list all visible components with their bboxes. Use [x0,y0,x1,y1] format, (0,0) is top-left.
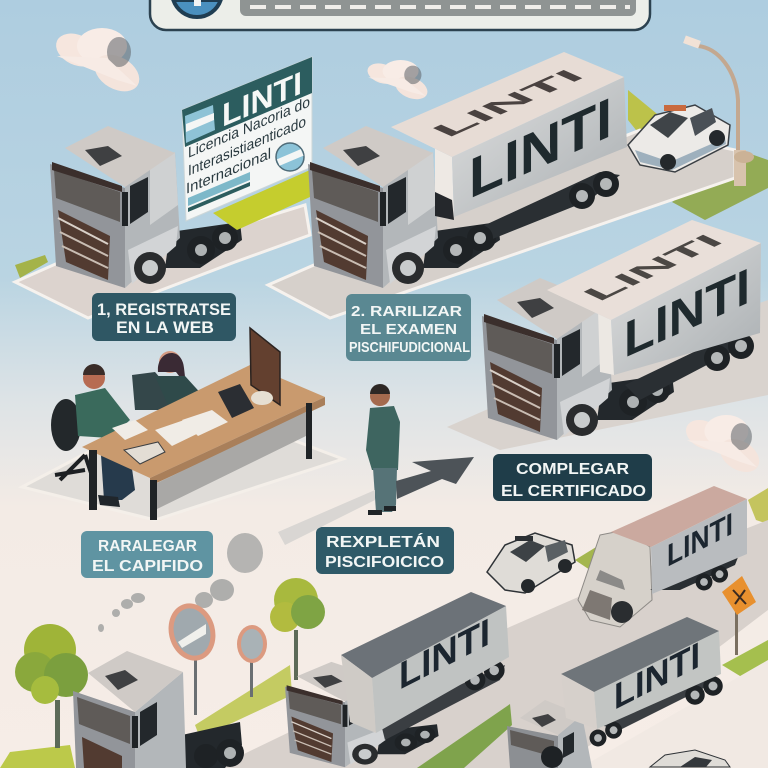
desk legs [89,403,312,520]
truck 6 trailer text: LINTI [399,609,490,698]
police car 1 [628,105,730,172]
header road strip [240,0,636,16]
truck 7 wheels [590,672,723,746]
trailer roof text: LINTI [575,231,731,305]
arrow [396,457,474,499]
person 2 [132,351,205,410]
truck 7 [507,617,723,768]
header banner [150,0,650,30]
label step 4 [81,531,213,578]
cloud 3 [681,414,765,479]
label step 2: 2. RARILIZAR [351,303,462,320]
truck 3 trailer [547,220,761,375]
trailer roof text: LINTI [425,66,592,141]
cloud 1 [51,27,146,99]
label step 1 [92,293,236,341]
label step 1: 1, REGISTRATSE [97,300,231,319]
truck 6 wheels [380,660,505,740]
tree left [15,624,88,748]
truck 4 wheels [650,552,740,590]
open drawer [124,442,165,464]
label step 5: REXPLETÁN [326,532,440,551]
label step 2 [346,294,471,361]
cloud 2 [364,59,432,104]
truck 4 trailer text: LINTI [667,505,733,574]
papers [112,410,228,446]
truck 6 [285,592,509,767]
label step 2: PISCHIFUDICIONAL [349,339,470,356]
sign body text: Interasistiaenticado [188,113,306,180]
truck 7 trailer text: LINTI [614,634,700,718]
person 1 [75,364,135,507]
label step 1: EN LA WEB [116,318,214,337]
sign body text: Internacional [186,145,271,198]
tree right [270,578,325,680]
sign stripes [188,172,250,212]
truck 5 bottom left cab [73,651,244,768]
truck 6 trailer [372,606,509,733]
icon: header info badge [173,0,221,17]
truck 1 with sign [50,57,312,288]
truck 4 small white truck [578,486,747,627]
road: truck 2 lane [268,130,735,318]
truck 7 cab [507,700,592,768]
road sign small [237,625,267,697]
LINTI sign board [182,57,312,230]
truck 6 cab [285,662,439,767]
truck 2 chassis and wheels [443,171,620,263]
sign body text: Licencia Nacoria do [188,94,310,162]
smoke trail [98,490,375,632]
chair [51,399,95,485]
desk scene [51,328,325,520]
label step 4: RARALEGAR [98,538,197,555]
sign title: LINTI [222,65,302,135]
flag [185,105,215,143]
telephone [251,391,273,405]
police car 2 [487,533,575,593]
laptop keyboard [218,384,254,418]
truck 7 trailer [594,631,721,729]
standing person [366,384,400,515]
trailer side text: LINTI [469,86,612,211]
trailer side text: LINTI [624,258,750,369]
label step 3: COMPLEGAR [516,461,629,478]
sign body text [186,94,310,198]
desk side panel [155,410,310,510]
label step 2: EL EXAMEN [360,321,457,338]
truck 3 cab [482,278,674,440]
sign round flag badge [276,143,304,171]
street lamp [683,36,754,186]
truck 1 cab [50,126,242,288]
road: truck 1 pad [15,205,310,318]
police car 3 [650,750,730,767]
road sign large [162,598,222,715]
label step 3 [493,454,652,501]
road: bottom right [580,660,768,768]
desk scene pad [22,420,343,520]
label step 5: PISCIFOICICO [325,554,444,571]
road: truck 3 lane [447,300,768,450]
grass: lower strip [417,704,512,768]
truck 4 trailer [651,499,747,594]
truck 4 cab [578,530,652,627]
truck 2 trailer [391,52,627,220]
road: lower highway [215,520,768,768]
warning sign [722,576,756,655]
desk top [82,365,325,478]
truck 2 [308,52,627,288]
label step 4: EL CAPIFIDO [92,558,203,575]
truck 3 chassis and wheels [625,325,754,400]
truck 3 [482,220,761,440]
truck 2 cab [308,126,500,288]
label step 5 [316,527,454,574]
monitor [250,328,280,405]
label step 3: EL CERTIFICADO [501,483,646,500]
